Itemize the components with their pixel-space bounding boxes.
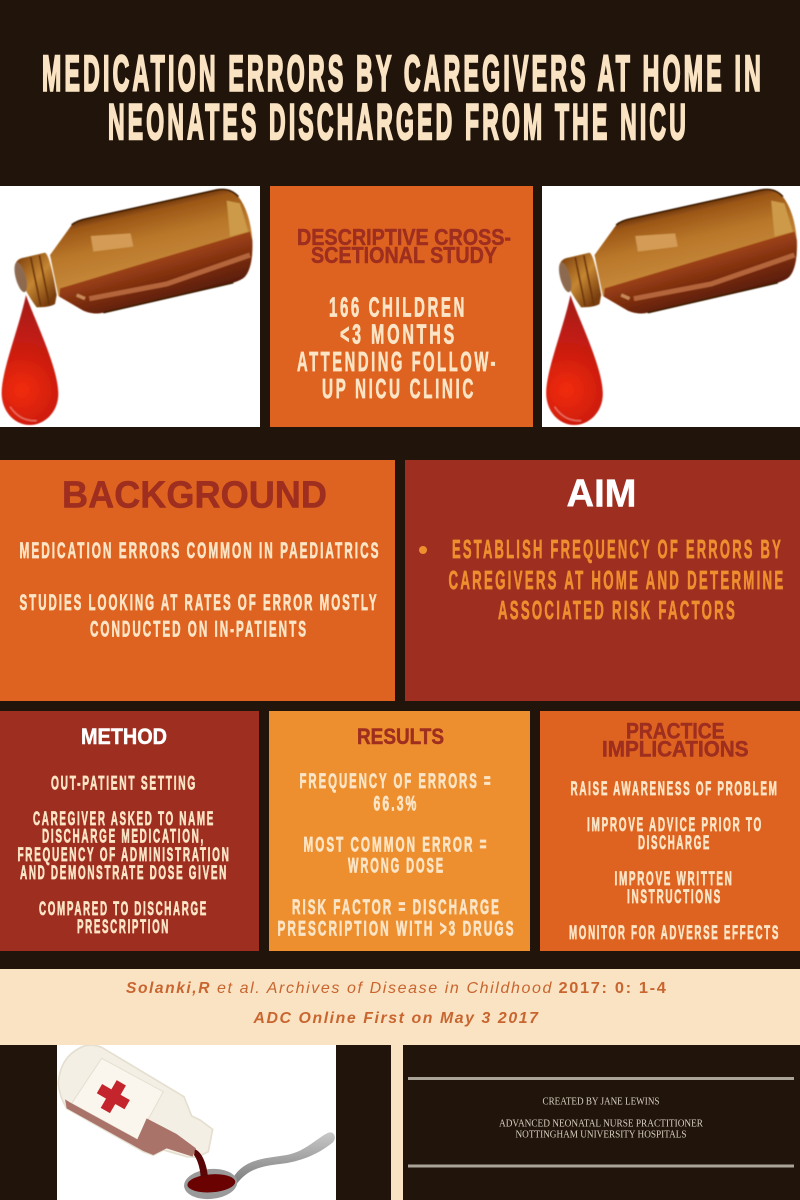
credit text (499, 1096, 703, 1140)
icon: red cross (96, 1080, 130, 1114)
syrup in spoon (187, 1174, 236, 1192)
citation line 2: ADC Online First on May 3 2017 (253, 1010, 540, 1027)
text block: result findings: 66.3% (374, 792, 418, 816)
panel: results (269, 711, 530, 951)
text block: background points: CONDUCTED ON IN-PATIENTS (90, 616, 308, 642)
image: amber bottle pouring red drop, left (0, 186, 260, 427)
heading: results: RESULTS (357, 724, 444, 749)
bullet (419, 546, 427, 554)
panel: background (0, 460, 395, 701)
spoon bowl (184, 1168, 238, 1200)
citation line 1: et al. Archives of Disease in Childhood (217, 980, 553, 997)
cream divider strip (391, 1045, 403, 1200)
text block: implications list (569, 778, 780, 944)
text block: background points: MEDICATION ERRORS COMMON IN PAEDIATRICS (20, 538, 380, 563)
image: amber bottle pouring red drop, right (542, 186, 800, 427)
text block: result findings: PRESCRIPTION WITH >3 DRUGS (278, 916, 516, 940)
credit text: ADVANCED NEONATAL NURSE PRACTITIONER (499, 1118, 703, 1130)
text block: result findings: RISK FACTOR = DISCHARGE (292, 895, 501, 919)
panel: aim (405, 460, 800, 701)
citation line 1: Solanki,R (126, 980, 211, 997)
panel: method (0, 711, 259, 951)
heading: practice implications: IMPLICATIONS (602, 736, 748, 762)
citation band (0, 969, 800, 1045)
credit text: NOTTINGHAM UNIVERSITY HOSPITALS (516, 1130, 686, 1140)
panel: practice implications (540, 711, 800, 951)
text block: method steps: PRESCRIPTION (77, 917, 170, 938)
text block: method steps: DISCHARGE MEDICATION, (42, 826, 205, 848)
text block: method steps: FREQUENCY OF ADMINISTRATION (18, 845, 230, 866)
heading: method: METHOD (81, 724, 167, 749)
text block: result findings: WRONG DOSE (348, 854, 445, 878)
credits panel (408, 1077, 794, 1168)
heading: practice implications (602, 718, 748, 762)
spoon handle (233, 1132, 335, 1184)
text block: study population: UP NICU CLINIC (322, 373, 476, 404)
text block: method steps: OUT-PATIENT SETTING (51, 772, 197, 794)
heading: practice implications: PRACTICE (626, 718, 724, 744)
syrup inside bottle (65, 1099, 196, 1157)
heading: study type: DESCRIPTIVE CROSS- (297, 224, 511, 250)
text block: study population: ATTENDING FOLLOW- (297, 346, 498, 377)
text block: background points: STUDIES LOOKING AT RATES OF ERROR MOSTLY (20, 590, 378, 615)
heading: study type (297, 224, 511, 268)
heading: aim: AIM (566, 472, 636, 516)
bottle body (58, 1045, 213, 1157)
title (42, 46, 764, 150)
text block: implications list: DISCHARGE (638, 832, 711, 854)
citation line 1 (126, 980, 668, 997)
bottom rule (408, 1164, 794, 1168)
text block: study population: 166 CHILDREN (329, 292, 467, 322)
heading: background: BACKGROUND (62, 474, 327, 516)
text block: method steps: CAREGIVER ASKED TO NAME (33, 809, 215, 830)
text block: method steps: AND DEMONSTRATE DOSE GIVEN (20, 863, 228, 884)
text block: result findings: FREQUENCY OF ERRORS = (300, 769, 492, 793)
image: white bottle pouring syrup onto spoon (57, 1045, 336, 1200)
panel: study design (270, 186, 533, 427)
credit text: CREATED BY JANE LEWINS (542, 1096, 660, 1108)
syrup pour stream (194, 1149, 208, 1177)
citation line 1: 2017: 0: 1-4 (558, 980, 668, 997)
top rule (408, 1077, 794, 1080)
text block: study population (297, 292, 498, 404)
text block: method steps (18, 772, 230, 938)
heading: study type: SCETIONAL STUDY (311, 242, 497, 268)
text block: result findings: MOST COMMON ERROR = (304, 832, 488, 856)
text block: study population: <3 MONTHS (340, 318, 457, 350)
text block: background points (20, 538, 380, 642)
text block: aim statement (448, 534, 786, 625)
text block: result findings (278, 769, 516, 940)
text block: method steps: COMPARED TO DISCHARGE (39, 899, 208, 920)
bottle label (72, 1058, 163, 1139)
